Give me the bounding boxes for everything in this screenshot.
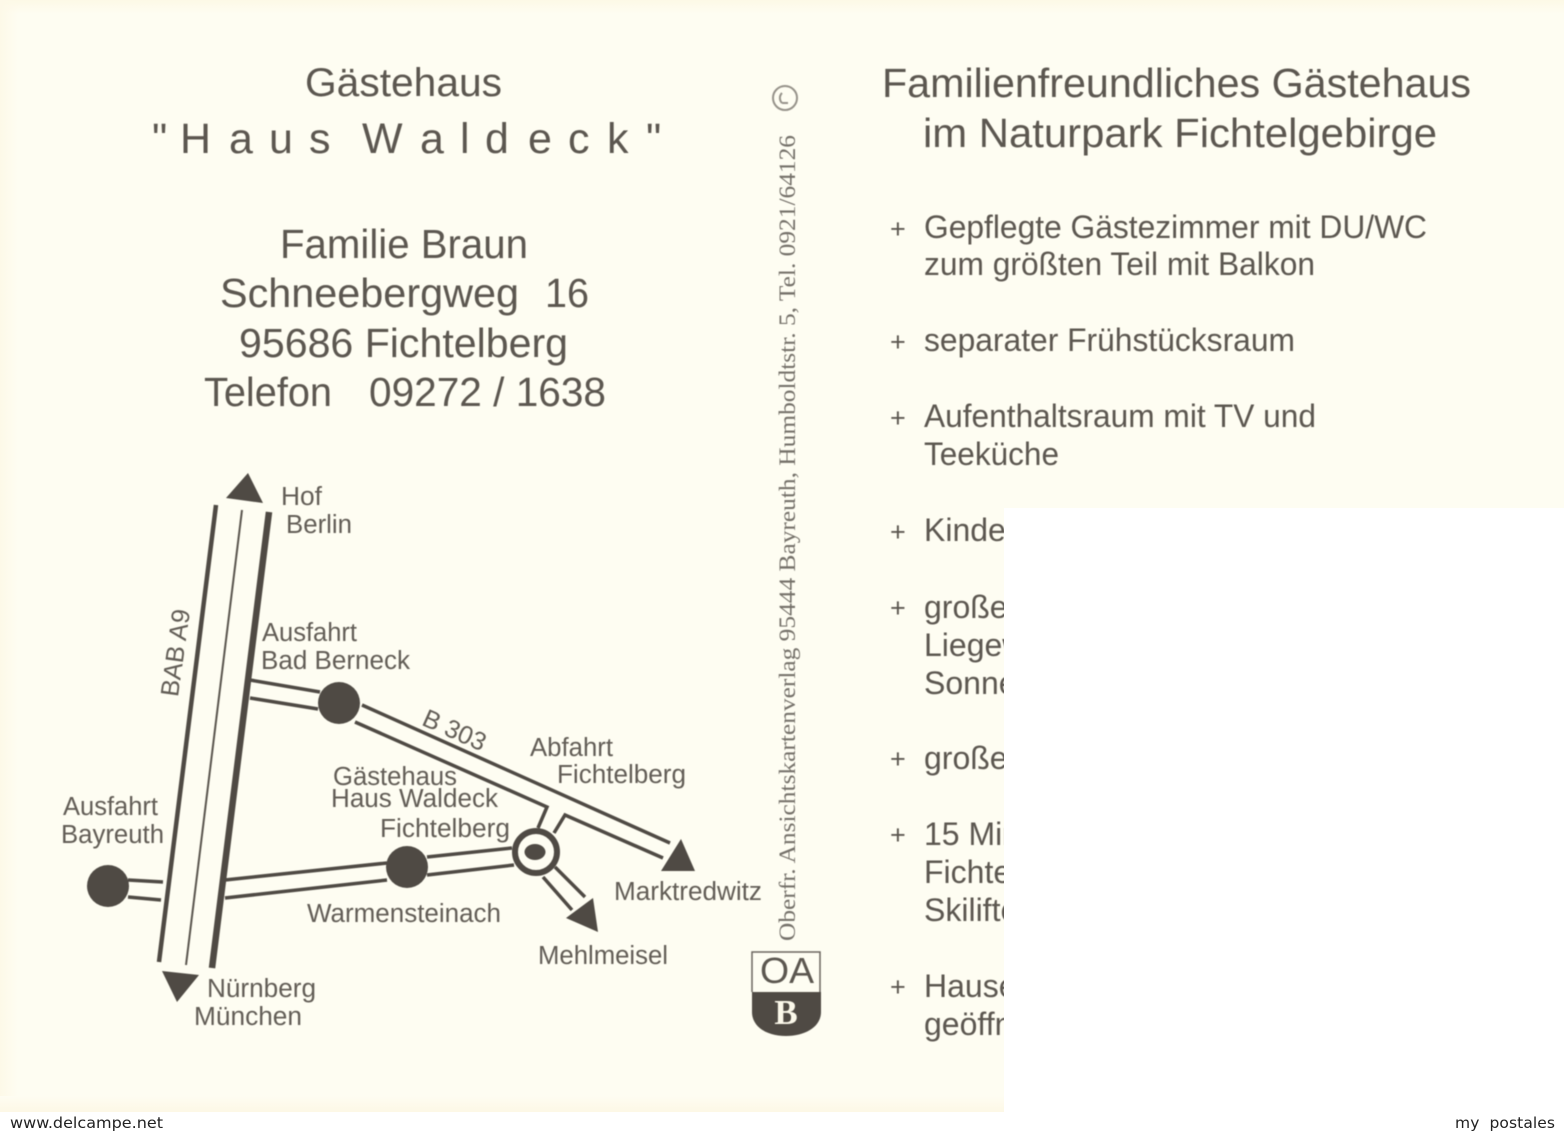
feature list: Fichtel: [924, 854, 1018, 890]
address block: 09272 / 1638: [369, 369, 606, 415]
heading: family-friendly guesthouse: [882, 60, 1471, 156]
feature list: 15 Min: [924, 816, 1020, 852]
heading: Gästehaus: Gästehaus: [305, 61, 502, 105]
feature list: +: [890, 403, 906, 433]
map labels: Fichtelberg: [557, 761, 686, 789]
feature list: [890, 209, 1427, 1042]
icon: copyright: [773, 86, 797, 110]
feature list: Skilifte: [924, 892, 1018, 928]
feature list: +: [890, 214, 906, 244]
feature list: große: [924, 589, 1008, 625]
feature list: +: [890, 820, 906, 850]
feature list: +: [890, 327, 906, 357]
road: Warmensteinach: [225, 848, 514, 898]
white cut-out area: [0, 508, 1564, 1131]
map labels: Warmensteinach: [307, 900, 501, 928]
node: Gästehaus Haus Waldeck: [515, 831, 557, 873]
node: Fichtelberg: [386, 846, 428, 888]
arrow: south: [162, 971, 199, 1002]
heading: family-friendly guesthouse: im Naturpark Fichtelgebirge: [923, 110, 1437, 156]
motorway BAB A9: [159, 505, 269, 968]
address block: Familie Braun: [280, 221, 528, 267]
road: Mehlmeisel: [543, 867, 585, 910]
map labels: Hof: [281, 483, 323, 511]
address block: Schneebergweg: [220, 270, 519, 316]
feature list: Kinder: [924, 512, 1017, 548]
feature list: separater Frühstücksraum: [924, 322, 1295, 358]
publisher logo OAB: B: [774, 993, 798, 1032]
map labels: Fichtelberg: [380, 815, 510, 843]
map labels: Bad Berneck: [261, 647, 410, 675]
feature list: Gepflegte Gästezimmer mit DU/WC: [924, 209, 1427, 245]
arrow: Marktredwitz: [661, 839, 695, 871]
feature list: Sonne: [924, 665, 1017, 701]
node: Bayreuth: [87, 865, 129, 907]
map labels: Berlin: [286, 511, 352, 539]
address block: [204, 221, 606, 415]
map labels: B 303: [418, 704, 490, 757]
feature list: Liegew: [924, 627, 1026, 663]
map labels: Mehlmeisel: [538, 942, 668, 970]
feature list: zum größten Teil mit Balkon: [924, 246, 1315, 282]
feature list: geöffn: [924, 1006, 1012, 1042]
feature list: +: [890, 517, 906, 547]
map labels: Gästehaus: [333, 763, 457, 791]
map labels: Haus Waldeck: [331, 785, 498, 813]
road: Bad Berneck exit: [250, 680, 320, 709]
address block: 16: [545, 270, 589, 316]
feature list: +: [890, 972, 906, 1002]
road: Bayreuth exit: [128, 880, 163, 900]
route map: [61, 473, 762, 1031]
feature list: +: [890, 744, 906, 774]
road: B 303: [355, 705, 670, 858]
feature list: große: [924, 740, 1008, 776]
map labels: Ausfahrt: [63, 793, 158, 821]
heading: Haus Waldeck: "Haus Waldeck": [152, 115, 661, 163]
feature list: Teeküche: [924, 436, 1059, 472]
address block: Telefon: [204, 369, 332, 415]
publisher logo OAB: OA: [760, 950, 814, 991]
vertical publisher imprint: Oberfr. Ansichtskartenverlag 95444 Bayreuth, Humboldtstr. 5, Tel. 0921/64126: [775, 135, 800, 941]
feature list: +: [890, 593, 906, 623]
publisher logo OAB: [752, 950, 821, 1036]
address block: 95686 Fichtelberg: [239, 320, 568, 366]
heading: family-friendly guesthouse: Familienfreundliches Gästehaus: [882, 60, 1471, 106]
right panel: features: [882, 60, 1471, 1042]
feature list: Aufenthaltsraum mit TV und: [924, 398, 1316, 434]
map labels: Marktredwitz: [614, 878, 762, 906]
map labels: Bayreuth: [61, 821, 164, 849]
node: Bad Berneck: [318, 682, 360, 724]
feature list: Hausei: [924, 968, 1024, 1004]
left panel: address: [152, 61, 661, 415]
map labels: [61, 483, 762, 1031]
map labels: Abfahrt: [530, 734, 613, 762]
map labels: Ausfahrt: [262, 619, 357, 647]
map labels: Nürnberg: [207, 975, 316, 1003]
arrow: Mehlmeisel: [566, 898, 598, 932]
map labels: München: [194, 1003, 302, 1031]
map labels: BAB A9: [156, 607, 196, 698]
arrow: north: [226, 473, 263, 503]
